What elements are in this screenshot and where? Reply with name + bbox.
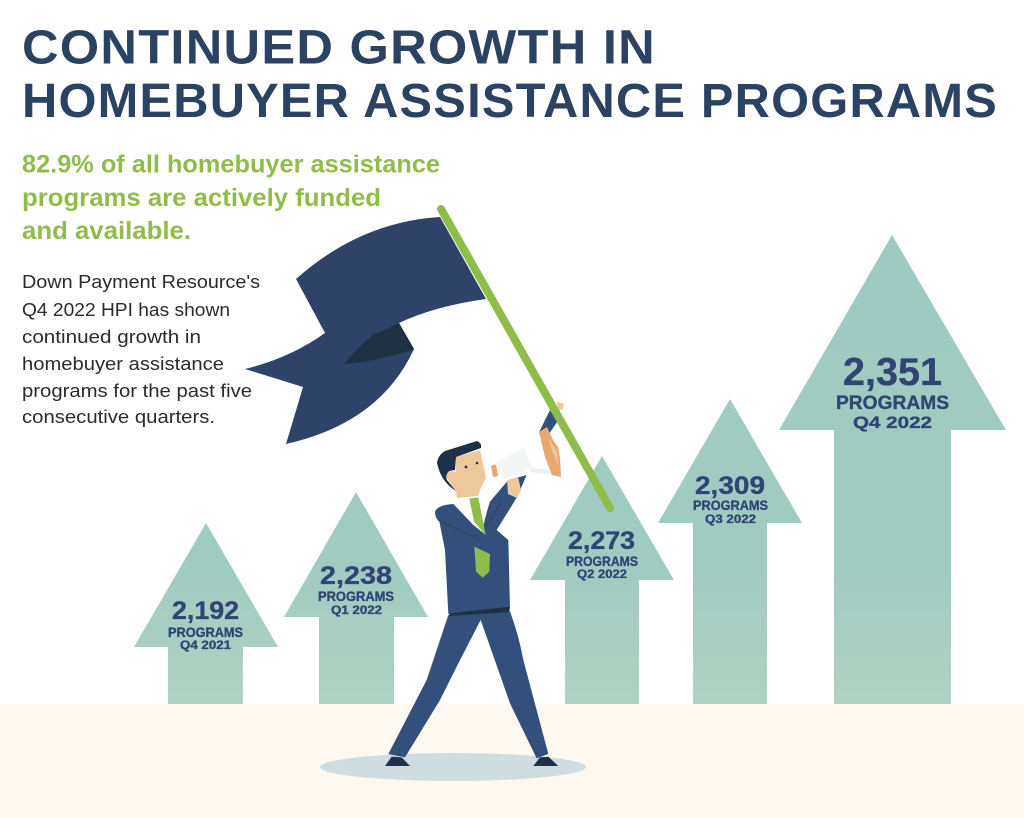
body text: continued growth in [22, 327, 201, 347]
ground shadow [320, 753, 586, 781]
green key statistic: and available. [22, 217, 191, 245]
arrow: Q1 2022: 2,238 [320, 562, 392, 590]
flag pole [441, 209, 610, 508]
arrow: Q1 2022: PROGRAMS [318, 588, 394, 604]
green key statistic: programs are actively funded [22, 184, 381, 212]
arrow: Q3 2022: Q3 2022 [705, 512, 756, 526]
arrow: Q4 2021: 2,192 [172, 597, 239, 625]
arrow: Q4 2021: Q4 2021 [180, 638, 231, 652]
body text: Q4 2022 HPI has shown [22, 300, 230, 320]
arrow: Q2 2022 [530, 456, 674, 704]
body text: Down Payment Resource's [22, 272, 260, 292]
arrow: Q4 2021 [134, 523, 278, 704]
arrow: Q1 2022 [284, 492, 428, 704]
arrow: Q2 2022: Q2 2022 [577, 567, 627, 581]
title: CONTINUED GROWTH IN [22, 22, 656, 74]
legs and shoes [385, 612, 558, 766]
businessman with megaphone [385, 402, 564, 766]
arrow: Q3 2022 [658, 399, 802, 704]
megaphone and hands [491, 427, 561, 498]
icon: flag [245, 217, 486, 444]
arrow: Q4 2022: 2,351 [843, 351, 942, 394]
title: HOMEBUYER ASSISTANCE PROGRAMS [22, 75, 998, 128]
body text [22, 272, 260, 427]
arrow: Q1 2022: Q1 2022 [331, 603, 382, 617]
green key statistic: 82.9% of all homebuyer assistance [22, 150, 440, 178]
body text: homebuyer assistance [22, 354, 224, 374]
arrow: Q3 2022: 2,309 [695, 472, 765, 500]
arrow: Q4 2021: PROGRAMS [168, 624, 243, 640]
ground band [0, 704, 1024, 818]
arrow: Q4 2022 [779, 235, 1006, 704]
torso and arms [435, 402, 564, 616]
head [437, 441, 486, 498]
arrow: Q2 2022: 2,273 [568, 527, 635, 555]
arrow: Q4 2022: PROGRAMS [836, 392, 949, 414]
arrow: Q3 2022: PROGRAMS [693, 497, 768, 513]
green key statistic [22, 150, 440, 245]
arrow: Q4 2022: Q4 2022 [853, 414, 932, 432]
title [22, 22, 998, 128]
body text: consecutive quarters. [22, 407, 215, 427]
body text: programs for the past five [22, 381, 252, 401]
arrow: Q2 2022: PROGRAMS [566, 553, 638, 569]
